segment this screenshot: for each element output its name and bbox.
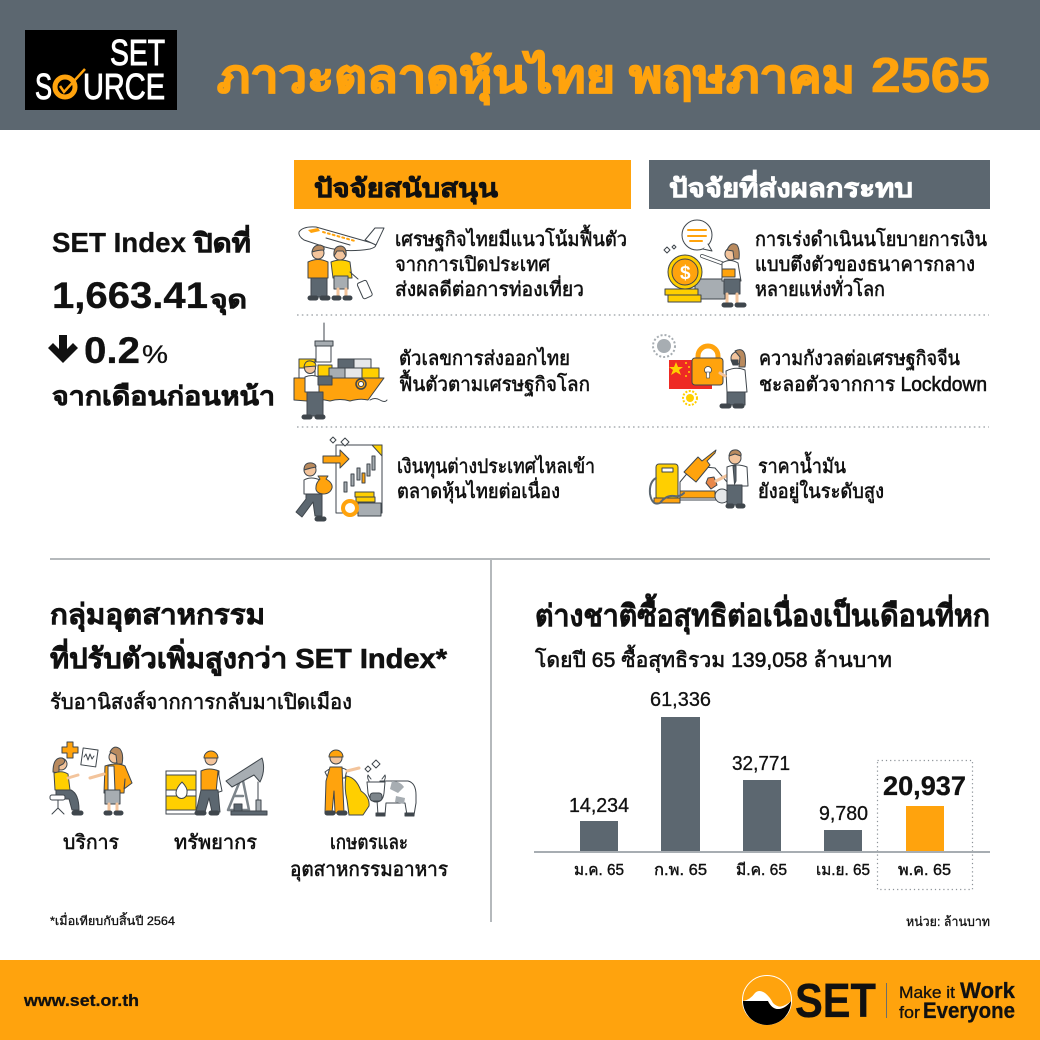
text: China slowdown xyxy=(759,348,987,396)
bar chart: เม.ย. 65 xyxy=(816,862,870,879)
heading: negative factors xyxy=(649,160,990,209)
text: foreign capital inflow: เงินทุนต่างประเทศไหลเข้า xyxy=(397,455,595,479)
tagline: Everyone xyxy=(923,998,1015,1023)
text: tight monetary policy: หลายแห่งทั่วโลก xyxy=(755,275,885,301)
text: China slowdown: ความกังวลต่อเศรษฐกิจจีน xyxy=(759,348,960,370)
heading: outperforming sectors: กลุ่มอุตสาหกรรม xyxy=(50,599,265,632)
icon: resources xyxy=(166,751,267,815)
heading: supporting factors: ปัจจัยสนับสนุน xyxy=(314,173,498,205)
text: Thai exports recovering xyxy=(399,347,590,396)
icon: fuel pump and car xyxy=(650,450,748,508)
unit note: หน่วย: ล้านบาท xyxy=(906,914,990,929)
text: oil prices high: ราคาน้ำมัน xyxy=(758,452,846,478)
tagline xyxy=(899,978,1016,1023)
icon: cargo ship xyxy=(294,323,387,419)
panel: SET Index summary: จุด xyxy=(210,286,247,316)
icon: plane and travellers xyxy=(299,227,384,300)
icon: foreign capital inflow xyxy=(296,437,382,521)
text: tight monetary policy: การเร่งดำเนินนโยบายการเงิน xyxy=(755,228,987,251)
logo: SET Source: S xyxy=(35,66,52,107)
icon: agriculture and food xyxy=(325,750,416,816)
heading: supporting factors xyxy=(294,160,631,209)
tagline: Make it xyxy=(899,984,955,1002)
panel: SET Index summary: 0.2 xyxy=(84,330,140,371)
text: tight monetary policy xyxy=(755,228,987,301)
title: 2565 xyxy=(871,49,990,103)
heading: foreign net buying: โดยปี 65 ซื้อสุทธิรวม 139,058 ล้านบาท xyxy=(535,645,892,673)
text: Thai exports recovering: ฟื้นตัวตามเศรษฐกิจโลก xyxy=(399,370,590,396)
panel: SET Index summary: SET Index xyxy=(52,227,186,258)
heading: outperforming sectors xyxy=(50,599,447,714)
text: foreign capital inflow: ตลาดหุ้นไทยต่อเนื่อง xyxy=(397,477,560,504)
logo: SET Source: URCE xyxy=(83,66,165,107)
panel: SET Index summary: % xyxy=(142,341,168,369)
text: oil prices high xyxy=(758,452,884,504)
sector labels: บริการ xyxy=(63,832,119,854)
heading: outperforming sectors: ที่ปรับตัวเพิ่มสูงกว่า SET Index* xyxy=(50,638,447,676)
footnote: *เมื่อเทียบกับสิ้นปี 2564 xyxy=(50,912,175,928)
tagline: Work xyxy=(960,978,1016,1003)
text: Thai economy recovering xyxy=(395,225,627,301)
text: Thai economy recovering: ส่งผลดีต่อการท่องเที่ยว xyxy=(395,275,584,301)
sector labels: อุตสาหกรรมอาหาร xyxy=(290,859,448,882)
footer band: www.set.or.th xyxy=(23,991,139,1010)
logo: SET Source: SET xyxy=(110,32,165,73)
bar chart: 14,234 xyxy=(569,795,629,817)
panel: SET Index summary: จากเดือนก่อนหน้า xyxy=(52,381,275,411)
sector labels: เกษตรและ xyxy=(330,832,408,854)
heading: foreign net buying: ต่างชาติซื้อสุทธิต่อเนื่องเป็นเดือนที่หก xyxy=(535,593,990,635)
text: Thai economy recovering: จากการเปิดประเทศ xyxy=(395,254,550,276)
panel: SET Index summary: 1,663.41 xyxy=(52,275,208,316)
text: oil prices high: ยังอยู่ในระดับสูง xyxy=(758,480,884,504)
logo: SET xyxy=(742,975,876,1028)
footer band xyxy=(0,960,1040,1040)
panel: SET Index summary xyxy=(48,224,275,411)
bar chart: 9,780 xyxy=(819,803,868,825)
text: Thai exports recovering: ตัวเลขการส่งออกไทย xyxy=(399,347,570,370)
logo: SET: SET xyxy=(795,975,876,1028)
text: foreign capital inflow xyxy=(397,455,595,504)
panel: SET Index summary: ปิดที่ xyxy=(193,224,251,258)
heading: foreign net buying xyxy=(535,593,990,673)
icon: China lockdown xyxy=(653,335,747,408)
heading: outperforming sectors: รับอานิสงส์จากการกลับมาเปิดเมือง xyxy=(50,690,352,714)
bar chart: 32,771 xyxy=(732,753,790,775)
bar chart: 20,937 xyxy=(883,771,966,801)
icon: down arrow xyxy=(48,335,78,363)
sector labels: ทรัพยากร xyxy=(174,832,257,854)
bar chart: 61,336 xyxy=(650,689,711,711)
bar chart: ก.พ. 65 xyxy=(654,862,707,879)
icon: central bank tightening: $ xyxy=(680,263,691,284)
bar chart: มี.ค. 65 xyxy=(736,862,787,879)
heading: negative factors: ปัจจัยที่ส่งผลกระทบ xyxy=(669,169,913,203)
logo: SET Source xyxy=(25,30,177,110)
icon: central bank tightening xyxy=(664,220,746,307)
bar chart xyxy=(534,689,990,890)
title xyxy=(217,49,990,105)
text: Thai economy recovering: เศรษฐกิจไทยมีแนวโน้มฟื้นตัว xyxy=(395,225,627,251)
tagline: for xyxy=(899,1004,921,1022)
bar chart: พ.ค. 65 xyxy=(898,862,951,879)
title: ภาวะตลาดหุ้นไทย พฤษภาคม xyxy=(217,50,855,105)
header band xyxy=(0,0,1040,130)
icon: services xyxy=(50,742,132,815)
text: China slowdown: ชะลอตัวจากการ Lockdown xyxy=(759,374,987,396)
bar chart: ม.ค. 65 xyxy=(574,862,624,879)
sector labels xyxy=(63,832,448,882)
text: tight monetary policy: แบบตึงตัวของธนาคารกลาง xyxy=(755,254,975,276)
